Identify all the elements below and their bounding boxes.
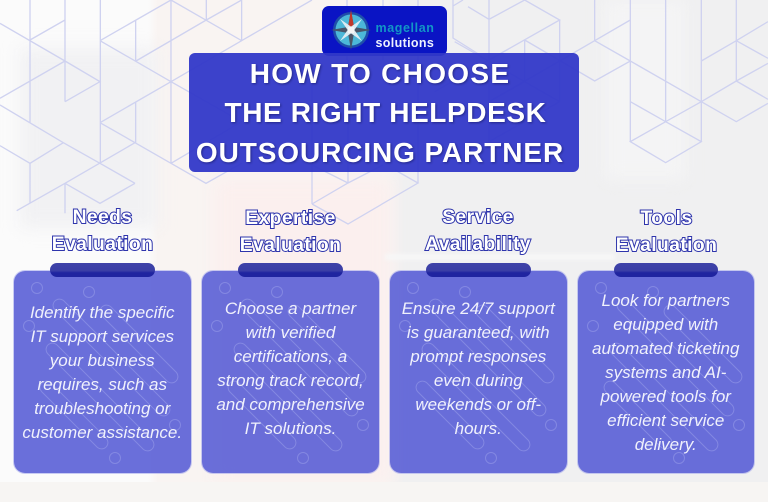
text: expertise evaluation: IT solutions. xyxy=(245,418,336,438)
text: service availability: Ensure 24/7 support xyxy=(402,298,555,318)
heading: service availability xyxy=(424,207,532,255)
text: needs evaluation: troubleshooting or xyxy=(34,398,170,418)
card pattern xyxy=(399,282,557,464)
title: HOW TO CHOOSE xyxy=(250,58,510,89)
text: expertise evaluation: with verified xyxy=(246,322,335,342)
text: service availability: prompt responses xyxy=(410,346,546,366)
logo badge xyxy=(322,6,446,56)
text: tools evaluation: equipped with xyxy=(613,314,718,334)
text: expertise evaluation: strong track record, xyxy=(217,370,364,390)
panel: expertise evaluation xyxy=(202,270,379,473)
text: tools evaluation: efficient service xyxy=(607,410,724,430)
text: needs evaluation: customer assistance. xyxy=(22,422,182,442)
icon: compass xyxy=(332,10,370,50)
tab: needs evaluation xyxy=(50,263,154,277)
heading: needs evaluation: Evaluation xyxy=(52,234,153,254)
text: service availability: is guaranteed, with xyxy=(407,322,550,342)
card pattern xyxy=(211,282,369,464)
tab: expertise evaluation xyxy=(238,263,342,277)
text: tools evaluation: automated ticketing xyxy=(592,338,739,358)
heading: tools evaluation: Evaluation xyxy=(616,234,717,256)
text: expertise evaluation: certifications, a xyxy=(234,346,347,366)
text: expertise evaluation xyxy=(216,298,365,438)
text: tools evaluation: Look for partners xyxy=(601,290,730,310)
title: OUTSOURCING PARTNER xyxy=(196,136,564,168)
hexagon line pattern xyxy=(0,0,768,225)
text: service availability xyxy=(402,298,556,438)
text: needs evaluation: requires, such as xyxy=(38,374,167,394)
text: tools evaluation: systems and AI- xyxy=(605,362,726,382)
panel: service availability xyxy=(390,270,566,473)
text: tools evaluation: powered tools for xyxy=(601,386,731,406)
heading: service availability: Availability xyxy=(425,234,531,254)
panel: tools evaluation xyxy=(578,270,754,473)
tab: tools evaluation xyxy=(614,263,718,277)
text: needs evaluation: IT support services xyxy=(30,326,174,346)
text: tools evaluation: delivery. xyxy=(635,434,697,454)
text: service availability: weekends or off- xyxy=(415,394,541,414)
text: needs evaluation xyxy=(22,302,182,442)
heading: needs evaluation: Needs xyxy=(73,207,132,228)
card pattern xyxy=(587,282,745,464)
hexagon lines behind title xyxy=(312,0,480,224)
logo text: magellan xyxy=(376,21,434,35)
heading: service availability: Service xyxy=(442,207,514,228)
heading: expertise evaluation: Expertise xyxy=(245,208,336,229)
panel: needs evaluation xyxy=(14,270,190,473)
title: THE RIGHT HELPDESK xyxy=(225,96,546,128)
text: service availability: hours. xyxy=(455,418,502,438)
heading: needs evaluation xyxy=(52,207,153,254)
title xyxy=(189,52,579,172)
logo text xyxy=(376,21,434,50)
heading: expertise evaluation xyxy=(240,208,341,256)
text: expertise evaluation: and comprehensive xyxy=(216,394,365,414)
text: needs evaluation: your business xyxy=(50,350,155,370)
card pattern xyxy=(23,282,181,464)
heading: tools evaluation: Tools xyxy=(640,208,692,229)
text: needs evaluation: Identify the specific xyxy=(30,302,175,322)
text: tools evaluation xyxy=(592,290,740,454)
tab: service availability xyxy=(426,263,530,277)
text: expertise evaluation: Choose a partner xyxy=(225,298,356,318)
logo text: solutions xyxy=(376,36,434,50)
text: service availability: even during xyxy=(434,370,523,390)
heading: expertise evaluation: Evaluation xyxy=(240,234,341,256)
heading: tools evaluation xyxy=(616,208,717,256)
